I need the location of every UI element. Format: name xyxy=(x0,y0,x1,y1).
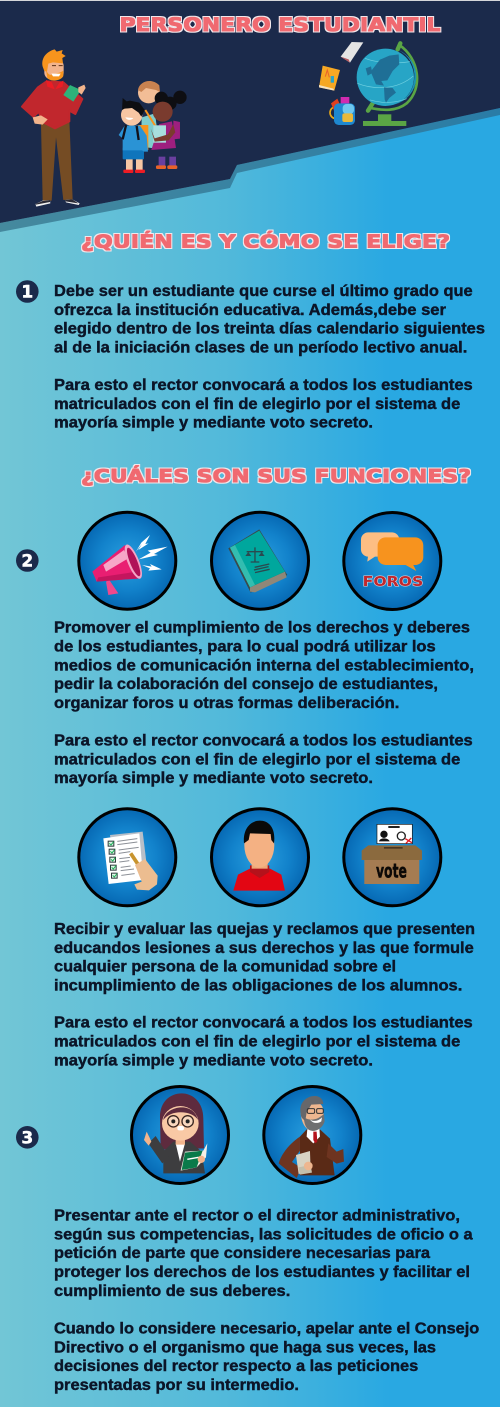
text: funciones 1: pedir la colaboración del consejo de estudiantes, xyxy=(54,676,438,693)
text: quién es: ofrezca la institución educativa. Además,debe ser xyxy=(54,302,446,319)
text: funciones 1: Promover el cumplimiento de los derechos y deberes xyxy=(54,620,470,637)
text: funciones 3: proteger los derechos de los estudiantes y facilitar el xyxy=(54,1264,470,1281)
text: convocatoria: Para esto el rector convocará a todos los estudiantes xyxy=(54,377,473,394)
icon: megaphone xyxy=(79,512,176,609)
text: funciones 1: de los estudiantes, para lo cual podrá utilizar los xyxy=(54,638,436,656)
text: funciones 2: Recibir y evaluar las quejas y reclamos que presenten xyxy=(54,921,475,938)
text: convocatoria: mayoría simple y mediante voto secreto. xyxy=(54,414,373,432)
title: PERSONERO ESTUDIANTIL xyxy=(120,14,440,36)
text: funciones 3: según sus competencias, las solicitudes de oficio o a xyxy=(54,1226,473,1244)
text: funciones 3: petición de parte que considere necesarias para xyxy=(54,1245,430,1262)
text: convocatoria 2 xyxy=(54,732,473,787)
text: funciones 2 xyxy=(54,921,475,994)
icon: forum speech bubbles xyxy=(344,512,441,610)
text: convocatoria xyxy=(54,377,473,432)
illustration: globe xyxy=(357,43,417,126)
text: apelación: decisiones del rector respecto a las peticiones xyxy=(54,1358,419,1375)
icon: student portrait xyxy=(212,809,308,906)
illustration: students xyxy=(119,81,187,173)
text: funciones 1: medios de comunicación interna del establecimiento, xyxy=(54,657,474,674)
number badge 1 xyxy=(16,280,39,303)
text: funciones 3: Presentar ante el rector o el director administrativo, xyxy=(54,1208,460,1225)
text: funciones 2: incumplimiento de las obligaciones de los alumnos. xyxy=(54,977,462,994)
text: convocatoria 2: matriculados con el fin de elegirlo por el sistema de xyxy=(54,751,461,768)
number badge 3: 3 xyxy=(21,1128,33,1148)
text: funciones 1 xyxy=(54,620,474,712)
text: funciones 2: educandos lesiones a sus derechos y las que formule xyxy=(54,940,474,957)
icon: woman with book xyxy=(132,1086,228,1184)
text: funciones 3: cumplimiento de sus deberes. xyxy=(54,1283,290,1300)
illustration: teacher with book xyxy=(22,49,86,207)
text: convocatoria 2: mayoría simple y mediante voto secreto. xyxy=(54,770,373,787)
text: quién es xyxy=(54,283,485,356)
text: convocatoria: matriculados con el fin de elegirlo por el sistema de xyxy=(54,396,461,413)
text: quién es: elegido dentro de los treinta días calendario siguientes xyxy=(54,320,485,338)
text: funciones 1: organizar foros u otras formas deliberación. xyxy=(54,695,399,712)
text: quién es: Debe ser un estudiante que curse el último grado que xyxy=(54,283,473,300)
header band xyxy=(0,0,500,232)
text: apelación: presentadas por su intermedio. xyxy=(54,1377,299,1394)
number badge 2: 2 xyxy=(21,552,33,572)
number badge 2 xyxy=(16,549,39,572)
icon: ballot box xyxy=(344,809,441,906)
number badge 1: 1 xyxy=(21,282,33,302)
text: apelación: Directivo o el organismo que haga sus veces, las xyxy=(54,1339,436,1356)
icon: forum speech bubbles: FOROS xyxy=(363,575,423,590)
icon: law book xyxy=(212,512,308,609)
text: apelación: Cuando lo considere necesario, apelar ante el Consejo xyxy=(54,1320,479,1338)
text: convocatoria 3: mayoría simple y mediante voto secreto. xyxy=(54,1052,373,1069)
icon: checklist with hand xyxy=(79,809,176,906)
icon: man with papers xyxy=(264,1086,361,1184)
text: funciones 2: cualquier persona de la comunidad sobre el xyxy=(54,958,396,976)
text: quién es: al de la iniciación clases de un período lectivo anual. xyxy=(54,339,467,356)
text: convocatoria 2: Para esto el rector convocará a todos los estudiantes xyxy=(54,732,473,750)
heading: funciones: ¿CUÁLES SON SUS FUNCIONES? xyxy=(81,465,471,487)
text: convocatoria 3: Para esto el rector convocará a todos los estudiantes xyxy=(54,1015,473,1032)
text: convocatoria 3: matriculados con el fin de elegirlo por el sistema de xyxy=(54,1034,461,1050)
text: apelación xyxy=(54,1320,479,1394)
text: convocatoria 3 xyxy=(54,1015,473,1069)
heading: quién es: ¿QUIÉN ES Y CÓMO SE ELIGE? xyxy=(81,230,450,252)
number badge 3 xyxy=(16,1126,39,1149)
text: funciones 3 xyxy=(54,1208,473,1300)
illustration: school items xyxy=(319,42,363,125)
icon: ballot box: vote xyxy=(376,859,407,882)
